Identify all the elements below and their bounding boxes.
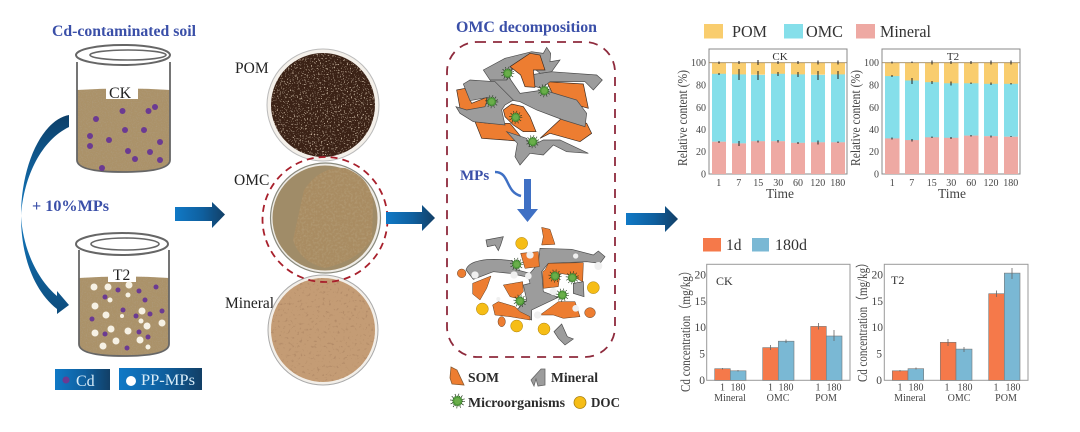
- bar chart: Cd concentration CK: [678, 264, 850, 404]
- bar chart: Cd concentration CK: POM: [815, 393, 837, 404]
- curved arrow: MPs to process: [495, 172, 521, 196]
- legend: DOC: [574, 396, 620, 411]
- bar chart: Cd concentration T2: Cd concentration（mg/kg）: [855, 257, 870, 382]
- bar chart: Cd concentration T2: 1: [898, 382, 902, 394]
- stacked bar chart: CK: 15: [753, 178, 763, 189]
- arrow: decomposition downward: [517, 179, 538, 222]
- legend: PP-MPs: PP-MPs: [141, 372, 195, 389]
- title: OMC decomposition: OMC decomposition: [456, 19, 597, 36]
- legend: Cd: [55, 369, 110, 390]
- stacked bar chart: CK: 20: [696, 147, 706, 158]
- legend: Mineral: Mineral: [551, 371, 598, 386]
- bar chart: Cd concentration CK: 180: [826, 382, 842, 394]
- label: OMC: OMC: [234, 172, 269, 189]
- bar chart: Cd concentration T2: 20: [872, 270, 883, 282]
- stacked bar chart: T2: 120: [984, 178, 998, 189]
- dashed circle: OMC highlight: [262, 157, 388, 282]
- label: Mineral: Mineral: [225, 295, 274, 312]
- stacked bar chart: T2: Relative content (%): [848, 70, 863, 166]
- bar chart: Cd concentration T2: [855, 257, 1028, 404]
- stacked bar chart: T2: 20: [869, 147, 879, 158]
- stacked bar chart: T2: 60: [869, 103, 879, 114]
- legend: stacked chart fractions: Mineral: [880, 22, 931, 41]
- bar chart: Cd concentration T2: 1: [994, 382, 998, 394]
- legend: 1d and 180d: 180d: [775, 237, 807, 254]
- legend: Mineral: [531, 369, 598, 386]
- bar chart: Cd concentration CK: 5: [699, 348, 705, 360]
- bar chart: Cd concentration T2: 0: [876, 375, 882, 387]
- panel: OMC decomposition dashed frame: [447, 42, 615, 357]
- bar chart: Cd concentration CK: 10: [694, 322, 706, 334]
- bar chart: Cd concentration T2: POM: [995, 393, 1017, 404]
- bar chart: Cd concentration T2: 180: [958, 382, 972, 394]
- stacked bar chart: CK: 30: [773, 178, 783, 189]
- stacked bar chart: CK: 40: [696, 125, 706, 136]
- stacked bar chart: CK: Time: [766, 186, 794, 201]
- stacked bar chart: T2: T2: [947, 51, 959, 63]
- petri dish: POM: [267, 49, 379, 161]
- bar chart: Cd concentration CK: Mineral: [714, 393, 746, 404]
- petri dish: OMC: [270, 163, 380, 273]
- stacked bar chart: T2: 80: [869, 80, 879, 92]
- beaker: CK soil with Cd: [76, 45, 170, 172]
- stacked bar chart: CK: 60: [696, 103, 706, 114]
- stacked bar chart: CK: 80: [696, 80, 706, 92]
- curved arrow: add microplastics: [21, 115, 69, 314]
- stacked bar chart: T2: 30: [946, 178, 956, 189]
- stacked bar chart: CK: 60: [793, 178, 803, 189]
- stacked bar chart: T2: [848, 49, 1020, 201]
- bar chart: Cd concentration CK: 15: [694, 296, 706, 308]
- stacked bar chart: T2: 1: [890, 178, 895, 189]
- stacked bar chart: CK: [675, 49, 847, 201]
- stacked bar chart: CK: 180: [830, 178, 845, 189]
- bar chart: Cd concentration CK: OMC: [767, 393, 790, 404]
- bar chart: Cd concentration CK: 1: [720, 382, 725, 394]
- bar chart: Cd concentration CK: 0: [699, 375, 705, 387]
- legend: SOM: SOM: [468, 371, 499, 386]
- label: POM: POM: [235, 60, 269, 77]
- stacked bar chart: T2: 100: [864, 58, 879, 69]
- legend: Microorganisms: Microorganisms: [468, 396, 566, 411]
- bar chart: Cd concentration T2: OMC: [948, 393, 971, 404]
- arrow: OMC to decomposition: [386, 205, 435, 231]
- title: Cd-contaminated soil: Cd-contaminated soil: [52, 23, 197, 40]
- bar chart: Cd concentration CK: CK: [716, 274, 733, 288]
- legend: 1d and 180d: [703, 237, 807, 254]
- stacked bar chart: T2: 180: [1003, 178, 1018, 189]
- bar chart: Cd concentration T2: 180: [908, 382, 924, 394]
- legend: stacked chart fractions: OMC: [806, 22, 843, 41]
- bar chart: Cd concentration CK: Cd concentration（mg/kg）: [678, 265, 693, 392]
- stacked bar chart: CK: CK: [772, 51, 788, 63]
- stacked bar chart: T2: 40: [869, 125, 879, 136]
- bar chart: Cd concentration CK: 20: [694, 270, 706, 282]
- bar chart: Cd concentration CK: 180: [778, 382, 794, 394]
- beaker: CK soil with Cd: CK: [109, 85, 132, 102]
- legend: SOM: [450, 367, 499, 386]
- legend: 1d and 180d: 1d: [726, 237, 742, 254]
- legend: stacked chart fractions: [704, 22, 931, 41]
- stacked bar chart: CK: 0: [701, 170, 706, 180]
- bar chart: Cd concentration CK: 1: [768, 382, 773, 394]
- bar chart: Cd concentration T2: 1: [944, 382, 950, 394]
- stacked bar chart: CK: 7: [736, 178, 741, 189]
- stacked bar chart: T2: 7: [909, 178, 914, 189]
- legend: stacked chart fractions: POM: [732, 22, 767, 41]
- bar chart: Cd concentration CK: 180: [730, 382, 746, 394]
- arrow: decomposition to charts: [626, 206, 678, 232]
- stacked bar chart: CK: 100: [691, 58, 706, 69]
- stacked bar chart: T2: 15: [927, 178, 937, 189]
- diagram: intact aggregate before MPs: [456, 47, 602, 165]
- legend: DOC: DOC: [591, 396, 620, 411]
- bar chart: Cd concentration T2: 15: [872, 296, 883, 308]
- label: MPs: MPs: [460, 168, 489, 184]
- stacked bar chart: CK: 1: [716, 178, 721, 189]
- arrow: soil to fractions: [175, 202, 225, 228]
- stacked bar chart: CK: Relative content (%): [675, 70, 690, 166]
- beaker: T2 soil with Cd and PP-MPs: T2: [113, 267, 130, 284]
- bar chart: Cd concentration T2: 180: [1006, 382, 1020, 394]
- bar chart: Cd concentration T2: T2: [891, 273, 904, 287]
- legend: Cd: Cd: [76, 373, 95, 390]
- stacked bar chart: CK: 120: [810, 178, 825, 189]
- stacked bar chart: T2: 0: [874, 170, 879, 180]
- bar chart: Cd concentration T2: 5: [876, 348, 882, 360]
- beaker: T2 soil with Cd and PP-MPs: [76, 233, 169, 356]
- bar chart: Cd concentration T2: Mineral: [894, 393, 926, 404]
- legend: PP-MPs: [119, 368, 202, 390]
- stacked bar chart: T2: 60: [966, 178, 976, 189]
- bar chart: Cd concentration T2: 10: [872, 322, 883, 334]
- label: +10% MPs: + 10%MPs: [32, 198, 109, 215]
- petri dish: Mineral: [268, 275, 378, 385]
- diagram: disrupted aggregate after MPs: [457, 227, 605, 345]
- stacked bar chart: T2: Time: [938, 186, 966, 201]
- bar chart: Cd concentration CK: 1: [816, 382, 820, 394]
